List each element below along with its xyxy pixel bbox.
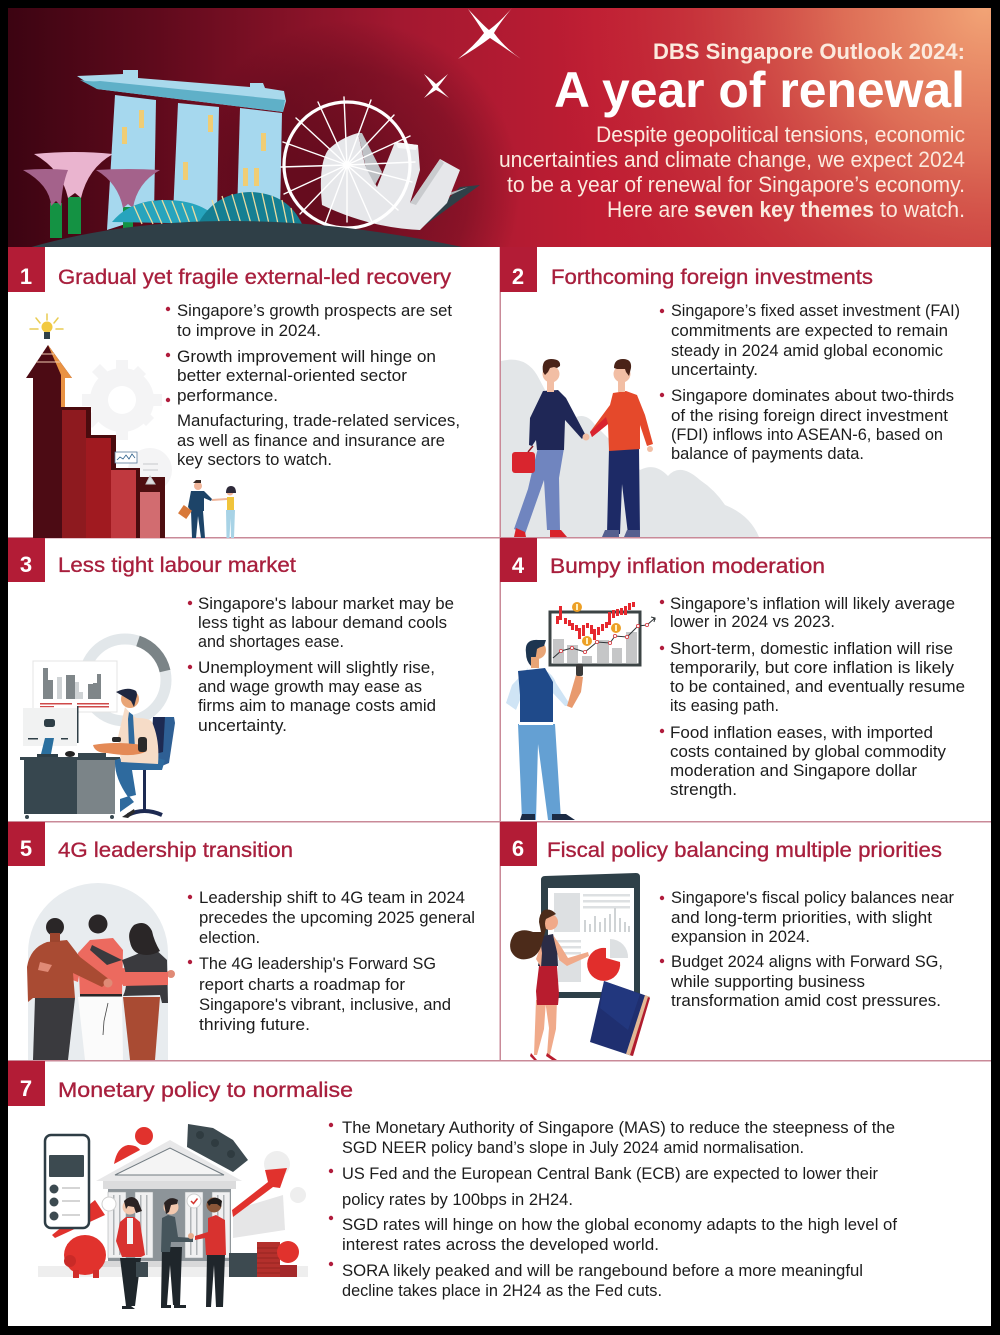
- header intro: to be a year of renewal for Singapore’s economy.: [507, 172, 965, 197]
- text block 4: to be contained, and eventually resume: [670, 677, 965, 696]
- heading 2: Forthcoming foreign investments: [551, 265, 873, 289]
- panel grid lines: [8, 247, 991, 1062]
- text block 3: less tight as labour demand cools: [198, 613, 447, 632]
- panel 7: monetary policy: [8, 1061, 897, 1309]
- number badge 3: 3: [20, 552, 32, 577]
- number badge 5: [8, 822, 45, 866]
- text block 2: steady in 2024 amid global economic: [671, 341, 943, 360]
- donut chart: [84, 639, 166, 721]
- lightbulb: [30, 314, 63, 339]
- text block 4: moderation and Singapore dollar: [670, 761, 917, 780]
- notebook: [590, 981, 650, 1056]
- bank building: [96, 1140, 242, 1267]
- stair steps: [26, 345, 165, 538]
- text block 1: key sectors to watch.: [177, 450, 332, 469]
- number badge 5: 5: [20, 836, 32, 861]
- number badge 7: 7: [20, 1076, 32, 1101]
- text block 5: precedes the upcoming 2025 general: [199, 908, 475, 927]
- Gardens by the Bay domes: [112, 192, 302, 224]
- text block 6: expansion in 2024.: [671, 927, 810, 946]
- colleague right: [90, 923, 168, 1060]
- number badge 7: [8, 1061, 45, 1106]
- heading 7: Monetary policy to normalise: [58, 1078, 353, 1102]
- text block 2: [660, 301, 960, 463]
- text block 1: Singapore’s growth prospects are set: [177, 301, 452, 320]
- illustration: office worker: [20, 639, 175, 819]
- tablet: [541, 873, 640, 998]
- illustration: business handshake: [501, 359, 759, 537]
- text block 4: strength.: [670, 780, 737, 799]
- text block 7: SGD rates will hinge on how the global economy adapts to the high level of: [342, 1215, 897, 1234]
- handshake figures: [178, 480, 236, 538]
- report card: [33, 661, 117, 712]
- number badge 3: [8, 538, 45, 582]
- text block 7: policy rates by 100bps in 2H24.: [342, 1190, 573, 1209]
- header title: A year of renewal: [554, 62, 965, 118]
- panel 2: foreign investments: [500, 247, 960, 537]
- text block 2: commitments are expected to remain: [671, 321, 948, 340]
- text block 3: Singapore's labour market may be: [198, 594, 454, 613]
- red arrow: [52, 1168, 287, 1238]
- mini chart: [115, 452, 137, 463]
- text block 5: [188, 888, 475, 1034]
- supertree: left: [23, 169, 68, 238]
- Marina Bay Sands: [77, 70, 286, 230]
- text block 4: Singapore’s inflation will likely average: [670, 594, 955, 613]
- text block 7: The Monetary Authority of Singapore (MAS) to reduce the steepness of the: [342, 1118, 895, 1137]
- text block 7: [329, 1118, 897, 1300]
- person right: [590, 359, 653, 537]
- text block 7: SGD NEER policy band’s slope in July 2024 amid normalisation.: [342, 1138, 804, 1157]
- ground hill: [28, 221, 467, 248]
- heading 5: 4G leadership transition: [58, 838, 293, 862]
- heading 3: Less tight labour market: [58, 553, 296, 577]
- header intro: uncertainties and climate change, we expect 2024: [499, 147, 965, 172]
- wallet and coins: [229, 1241, 299, 1277]
- text block 2: of the rising foreign direct investment: [671, 406, 948, 425]
- panel 5: leadership transition: [8, 822, 475, 1060]
- text block 2: (FDI) inflows into ASEAN-6, based on: [671, 425, 943, 444]
- header intro: to watch.: [880, 197, 965, 222]
- number badge 4: [500, 538, 537, 582]
- Singapore Flyer wheel: [281, 97, 415, 228]
- desk: [20, 751, 120, 819]
- text block 4: [660, 594, 965, 799]
- piggy bank: [64, 1235, 106, 1278]
- text block 2: Singapore dominates about two-thirds: [671, 386, 954, 405]
- chart board: [550, 602, 655, 665]
- worker: [93, 689, 165, 818]
- colleague left: [27, 918, 112, 1060]
- text block 4: lower in 2024 vs 2023.: [670, 612, 835, 631]
- ArtScience Museum: [321, 133, 480, 231]
- text block 5: thriving future.: [199, 1015, 310, 1034]
- woman in red jacket: [116, 1197, 148, 1309]
- panel 6: fiscal policy: [500, 822, 954, 1060]
- text block 7: SORA likely peaked and will be rangebound before a more meaningful: [342, 1261, 863, 1280]
- chair: [128, 717, 175, 815]
- phone: [45, 1135, 89, 1228]
- text block 2: Singapore’s fixed asset investment (FAI): [671, 301, 960, 320]
- text block 1: Growth improvement will hinge on: [177, 347, 436, 366]
- panel 1: external-led recovery: [8, 247, 460, 538]
- text block 2: balance of payments data.: [671, 444, 864, 463]
- number badge 6: [500, 822, 537, 866]
- star small: [424, 74, 449, 98]
- floor shadow: [38, 1266, 308, 1277]
- text block 1: better external-oriented sector: [177, 366, 407, 385]
- text block 7: interest rates across the developed world.: [342, 1235, 659, 1254]
- header intro: Here are: [607, 197, 689, 222]
- text block 3: Unemployment will slightly rise,: [198, 658, 435, 677]
- text block 6: [660, 888, 954, 1010]
- heading 1: Gradual yet fragile external-led recovery: [58, 265, 451, 289]
- illustration: rising stair arrow: [26, 314, 236, 538]
- supertree: right: [96, 169, 160, 231]
- text block 5: election.: [199, 928, 260, 947]
- number badge 1: 1: [20, 264, 32, 289]
- text block 1: to improve in 2024.: [177, 321, 321, 340]
- illustration: woman with tablet: [510, 873, 650, 1060]
- illustration: analyst at chart: [506, 602, 655, 820]
- header intro: Despite geopolitical tensions, economic: [596, 122, 965, 147]
- text block 1: as well as finance and insurance are: [177, 431, 445, 450]
- text block 3: and wage growth may ease as: [198, 677, 422, 696]
- number badge 2: 2: [512, 264, 524, 289]
- number badge 4: 4: [512, 553, 525, 578]
- text block 3: firms aim to manage costs amid: [198, 696, 436, 715]
- colleague middle: [36, 914, 175, 1060]
- number badge 1: [8, 247, 45, 292]
- text block 7: US Fed and the European Central Bank (ECB) are expected to lower their: [342, 1164, 878, 1183]
- text block 3: uncertainty.: [198, 716, 287, 735]
- text block 4: Food inflation eases, with imported: [670, 723, 933, 742]
- text block 5: report charts a roadmap for: [199, 975, 405, 994]
- header intro: seven key themes: [694, 197, 874, 222]
- supertree: centre: [34, 152, 113, 234]
- panel 4: inflation moderation: [500, 538, 965, 820]
- man in red jacket: [188, 1198, 226, 1307]
- text block 4: its easing path.: [670, 696, 779, 715]
- text block 6: Budget 2024 aligns with Forward SG,: [671, 952, 943, 971]
- heading 4: Bumpy inflation moderation: [550, 554, 825, 578]
- header kicker: DBS Singapore Outlook 2024:: [653, 39, 965, 64]
- person left: [512, 359, 590, 537]
- woman: [510, 910, 589, 1060]
- header banner: [8, 8, 991, 248]
- text block 1: [166, 301, 460, 469]
- text block 2: uncertainty.: [671, 360, 758, 379]
- heading 6: Fiscal policy balancing multiple priorities: [547, 838, 942, 862]
- header intro: [499, 122, 965, 222]
- illustration: central bank: [38, 1124, 308, 1309]
- banknotes: [187, 1124, 248, 1172]
- credit card: [233, 1195, 285, 1238]
- text block 6: and long-term priorities, with slight: [671, 908, 932, 927]
- text block 5: Leadership shift to 4G team in 2024: [199, 888, 465, 907]
- text block 3: [188, 594, 454, 735]
- coins top: [135, 1127, 153, 1145]
- text block 5: Singapore's vibrant, inclusive, and: [199, 995, 451, 1014]
- number badge 2: [500, 247, 537, 292]
- panel 3: labour market: [8, 538, 454, 819]
- man in grey: [161, 1198, 193, 1308]
- illustration: three colleagues: [27, 883, 175, 1060]
- analyst: [506, 640, 583, 820]
- text block 4: temporarily, but core inflation is likely: [670, 658, 955, 677]
- text block 1: Manufacturing, trade-related services,: [177, 411, 460, 430]
- star large: [458, 8, 521, 59]
- text block 5: The 4G leadership's Forward SG: [199, 954, 436, 973]
- text block 4: costs contained by global commodity: [670, 742, 946, 761]
- clouds: [501, 360, 759, 537]
- text block 3: and shortages ease.: [198, 632, 344, 651]
- text block 6: Singapore's fiscal policy balances near: [671, 888, 954, 907]
- text block 1: performance.: [177, 386, 278, 405]
- people: [116, 1197, 226, 1309]
- text block 4: Short-term, domestic inflation will rise: [670, 639, 953, 658]
- text block 6: while supporting business: [670, 972, 865, 991]
- text block 6: transformation amid cost pressures.: [671, 991, 941, 1010]
- monitor: [23, 706, 78, 757]
- text block 7: decline takes place in 2H24 as the Fed cuts.: [342, 1281, 662, 1300]
- illustration: Singapore skyline: [23, 8, 521, 248]
- number badge 6: 6: [512, 836, 524, 861]
